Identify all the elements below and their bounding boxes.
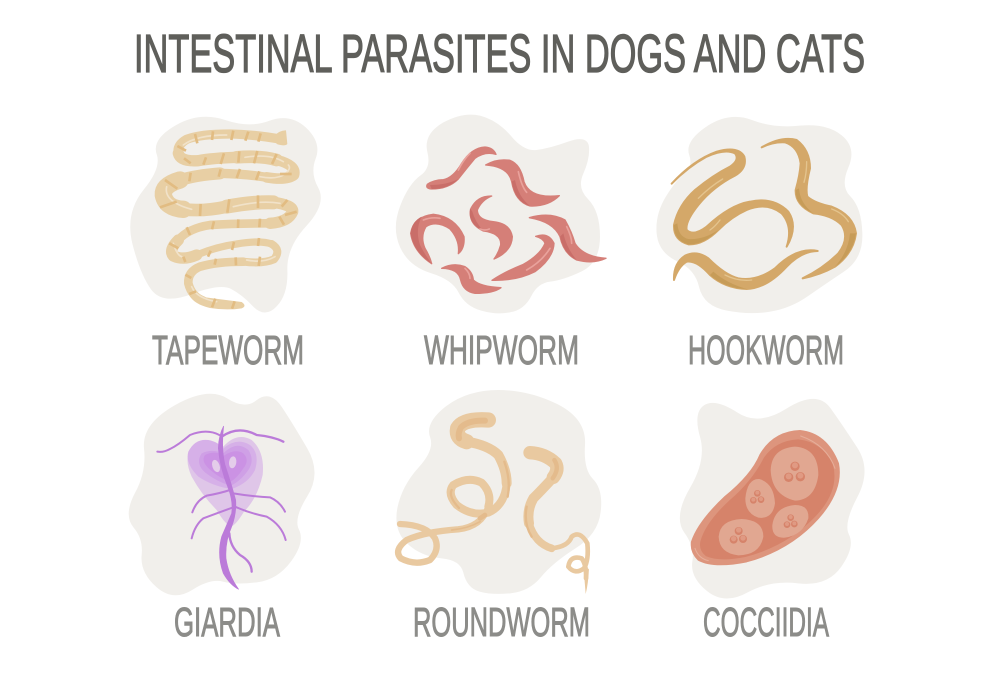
flagella and stem [218, 426, 239, 589]
icon: whipworm [397, 116, 606, 312]
icon: hookworm [658, 119, 861, 311]
shading [674, 188, 856, 289]
outer cell [691, 431, 839, 565]
panel: giardia [130, 395, 313, 645]
label: TAPEWORM [152, 327, 304, 373]
stripes [160, 131, 297, 309]
cyst: small upper [745, 479, 775, 518]
shading [451, 421, 557, 537]
highlights [801, 436, 835, 468]
head and tail tips [274, 130, 287, 145]
icon: tapeworm [132, 118, 319, 311]
inner cell [701, 441, 833, 558]
eyes [211, 459, 221, 473]
panel: whipworm [397, 116, 606, 373]
label: WHIPWORM [424, 327, 579, 373]
label: COCCIIDIA [703, 599, 829, 645]
label: HOOKWORM [688, 327, 844, 373]
panel: hookworm [658, 119, 861, 373]
icon: cocciidia [682, 401, 863, 597]
panel: cocciidia [682, 401, 863, 645]
panel: roundworm [398, 392, 600, 645]
cyst: right [772, 505, 808, 538]
icon: giardia [130, 395, 313, 594]
label: GIARDIA [174, 599, 280, 645]
label: ROUNDWORM [413, 599, 590, 645]
highlights [166, 135, 289, 302]
heart body layers [187, 437, 263, 527]
shading [411, 179, 577, 264]
cyst: large [771, 447, 818, 501]
cyst: lower left [719, 519, 763, 555]
icon: roundworm [398, 392, 600, 594]
panel: tapeworm [132, 118, 319, 373]
